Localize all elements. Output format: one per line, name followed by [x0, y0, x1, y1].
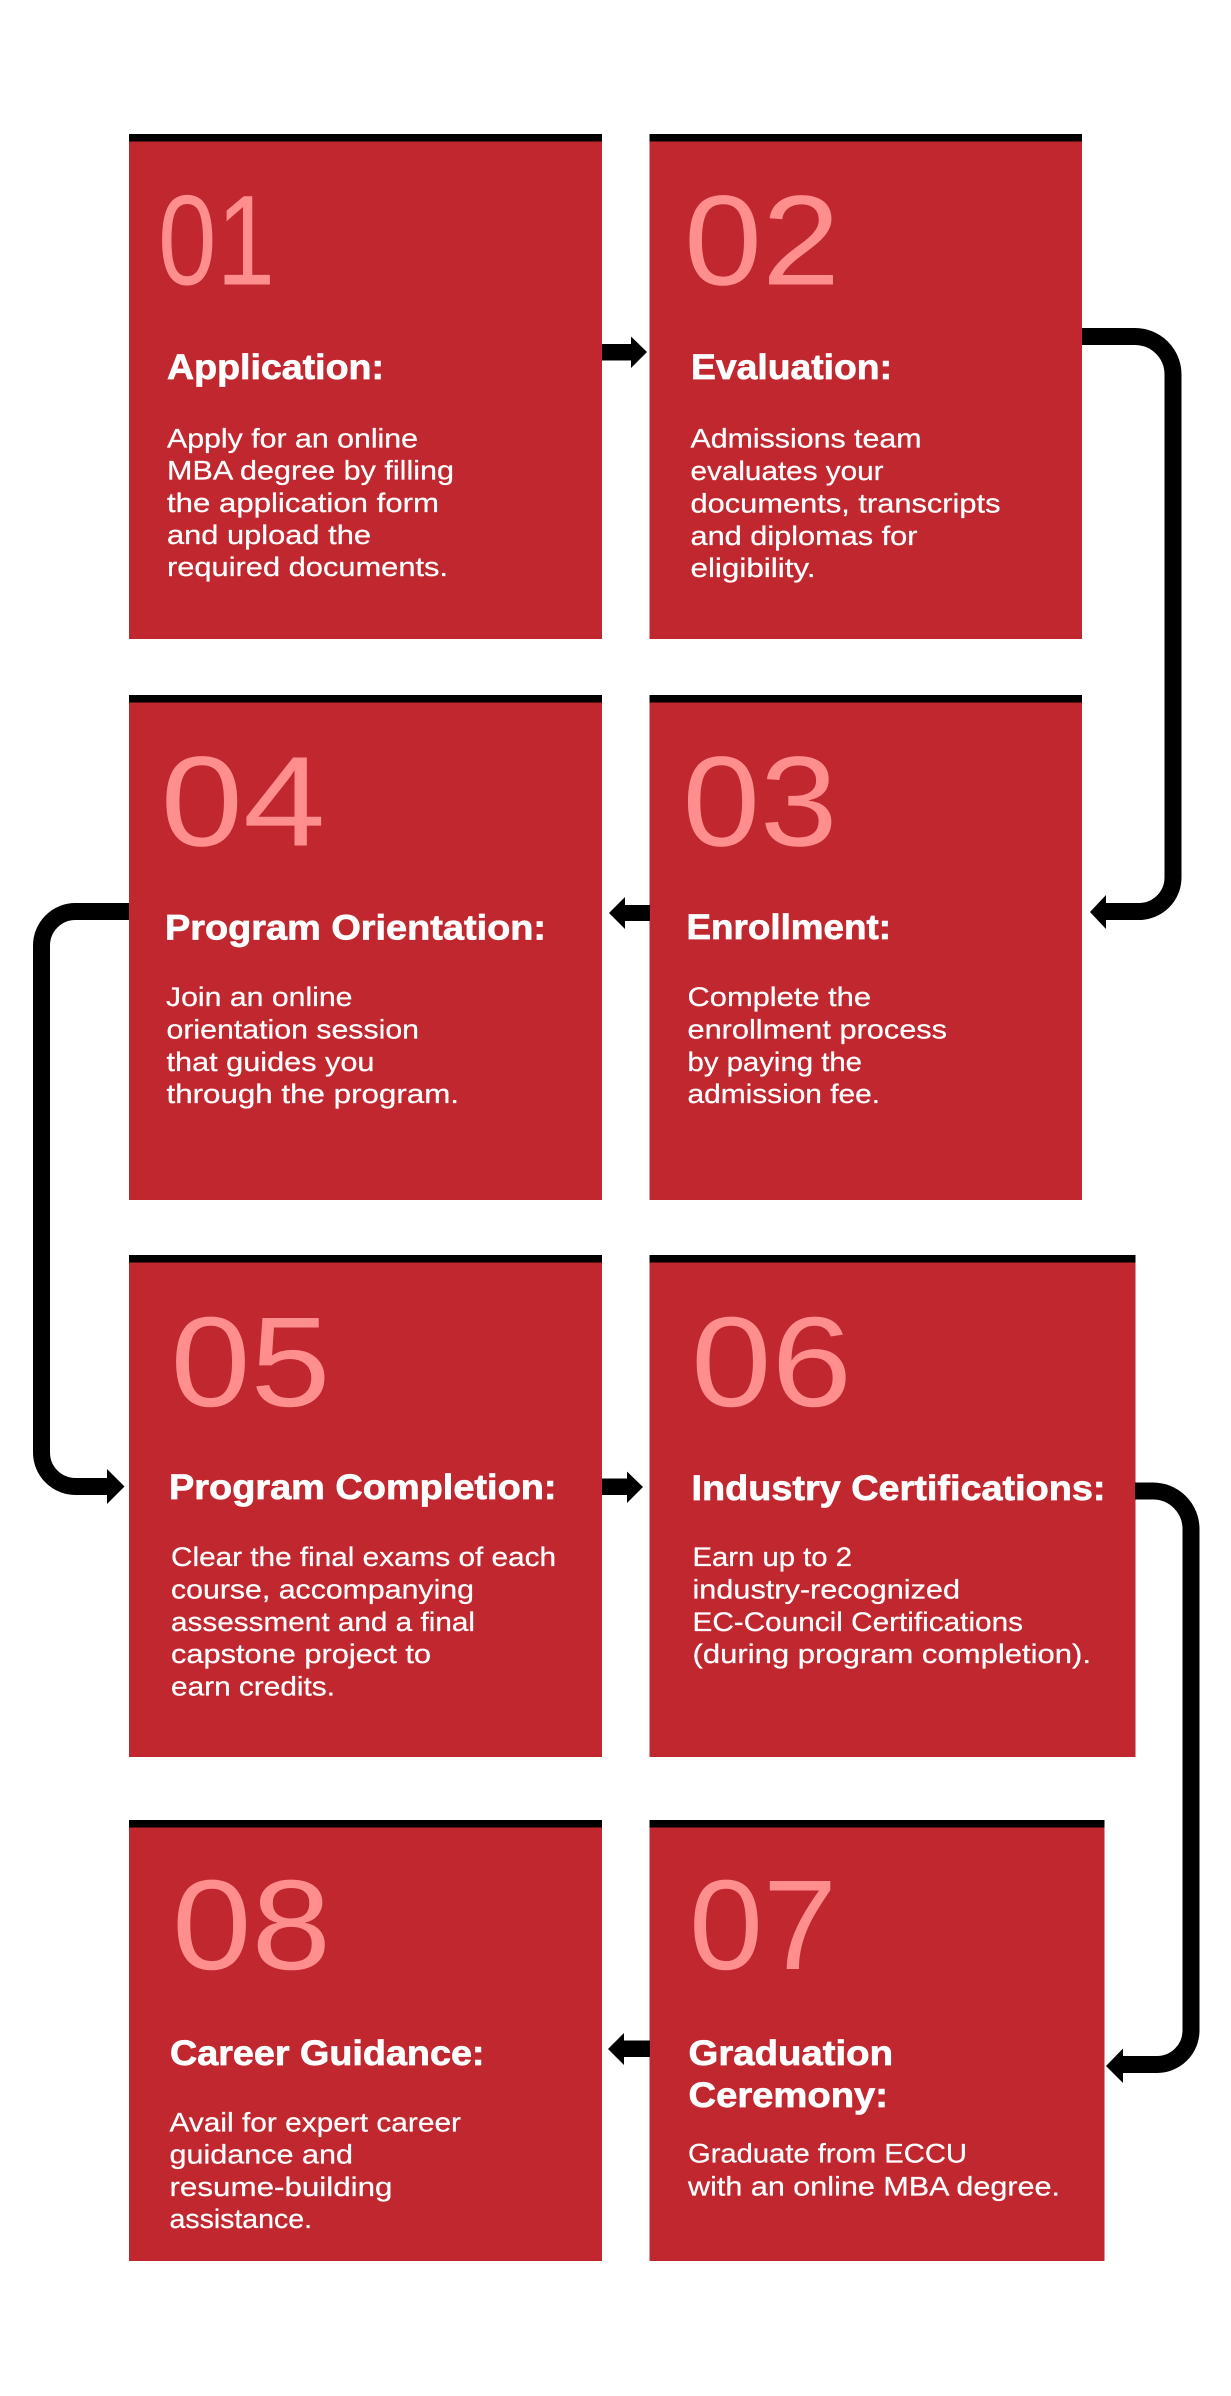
heading: program completion: Program Completion:: [169, 1468, 556, 1507]
number 05: 05: [170, 1291, 330, 1434]
arrow: 03 to 04: [609, 897, 650, 929]
text: program orientation description: through the program.: [166, 1079, 459, 1109]
arrow: 01 to 02: [602, 336, 647, 368]
number 01: 01: [158, 170, 275, 312]
text: career guidance description: resume-building: [170, 2172, 392, 2202]
panel: step 05 program completion: [129, 1255, 602, 1757]
text: career guidance description: assistance.: [170, 2204, 312, 2234]
text: program orientation description: Join an online: [166, 982, 352, 1012]
number 02: 02: [684, 170, 840, 312]
panel: step 06 industry certifications: [650, 1255, 1136, 1757]
arrow: 02 to 03: [1082, 336, 1173, 929]
text: program orientation description: [166, 982, 459, 1109]
text: evaluation description: Admissions team: [690, 424, 922, 454]
text: application description: the application form: [167, 488, 439, 518]
number 06: 06: [691, 1291, 852, 1434]
text: program completion description: assessment and a final: [171, 1607, 475, 1637]
text: enrollment description: [688, 982, 947, 1109]
number 08: 08: [172, 1854, 331, 1997]
number 07: 07: [689, 1854, 837, 1997]
arrow: 07 to 08: [608, 2033, 650, 2065]
text: industry certifications description: EC-Council Certifications: [692, 1607, 1023, 1637]
panel: step 04 program orientation: [129, 695, 602, 1200]
arrow: 05 to 06: [602, 1472, 643, 1503]
text: program completion description: course, accompanying: [171, 1574, 474, 1604]
text: industry certifications description: [692, 1542, 1091, 1669]
arrow: 04 to 05: [42, 912, 129, 1504]
number 03: 03: [682, 730, 838, 874]
number 04: 04: [160, 730, 326, 874]
heading: career guidance: Career Guidance:: [170, 2034, 484, 2073]
text: program completion description: Clear the final exams of each: [171, 1542, 556, 1572]
text: evaluation description: eligibility.: [690, 553, 816, 583]
heading: program orientation: Program Orientation:: [165, 908, 546, 948]
text: program orientation description: that guides you: [166, 1047, 374, 1077]
text: graduation ceremony description: [687, 2138, 1060, 2202]
heading: enrollment: Enrollment:: [686, 908, 891, 947]
text: enrollment description: enrollment process: [688, 1014, 947, 1044]
text: application description: MBA degree by filling: [167, 456, 454, 486]
text: application description: and upload the: [167, 520, 371, 550]
text: enrollment description: by paying the: [688, 1047, 862, 1077]
heading: graduation ceremony: [688, 2034, 893, 2115]
panel: step 08 career guidance: [129, 1820, 602, 2261]
text: program completion description: capstone project to: [171, 1639, 431, 1669]
arrow: 06 to 07: [1106, 1491, 1191, 2083]
text: enrollment description: admission fee.: [688, 1079, 880, 1109]
heading: application: Application:: [167, 348, 384, 387]
text: graduation ceremony description: with an online MBA degree.: [687, 2172, 1060, 2202]
text: graduation ceremony description: Graduate from ECCU: [688, 2138, 967, 2168]
text: evaluation description: and diplomas for: [690, 521, 918, 551]
panel: step 01 application: [129, 134, 602, 639]
text: enrollment description: Complete the: [688, 982, 871, 1012]
text: application description: required documents.: [167, 552, 448, 582]
text: career guidance description: guidance and: [170, 2140, 353, 2170]
text: career guidance description: Avail for expert career: [170, 2108, 461, 2138]
text: industry certifications description: industry-recognized: [692, 1574, 960, 1604]
text: industry certifications description: (during program completion).: [692, 1639, 1091, 1669]
text: industry certifications description: Earn up to 2: [692, 1542, 852, 1572]
text: application description: [167, 424, 454, 582]
text: program orientation description: orientation session: [166, 1014, 419, 1044]
text: career guidance description: [170, 2108, 461, 2234]
heading: industry certifications: Industry Certifications:: [692, 1469, 1106, 1508]
text: evaluation description: documents, transcripts: [690, 488, 1000, 518]
heading: graduation ceremony: Graduation: [688, 2034, 893, 2073]
panel: step 07 graduation ceremony: [650, 1820, 1104, 2261]
text: program completion description: [171, 1542, 556, 1702]
panel: step 02 evaluation: [650, 134, 1082, 639]
text: program completion description: earn credits.: [171, 1672, 335, 1702]
text: evaluation description: evaluates your: [690, 456, 884, 486]
panel: step 03 enrollment: [650, 695, 1082, 1200]
text: application description: Apply for an online: [167, 424, 418, 454]
text: evaluation description: [690, 424, 1000, 583]
heading: evaluation: Evaluation:: [691, 348, 892, 387]
heading: graduation ceremony: Ceremony:: [688, 2076, 888, 2115]
